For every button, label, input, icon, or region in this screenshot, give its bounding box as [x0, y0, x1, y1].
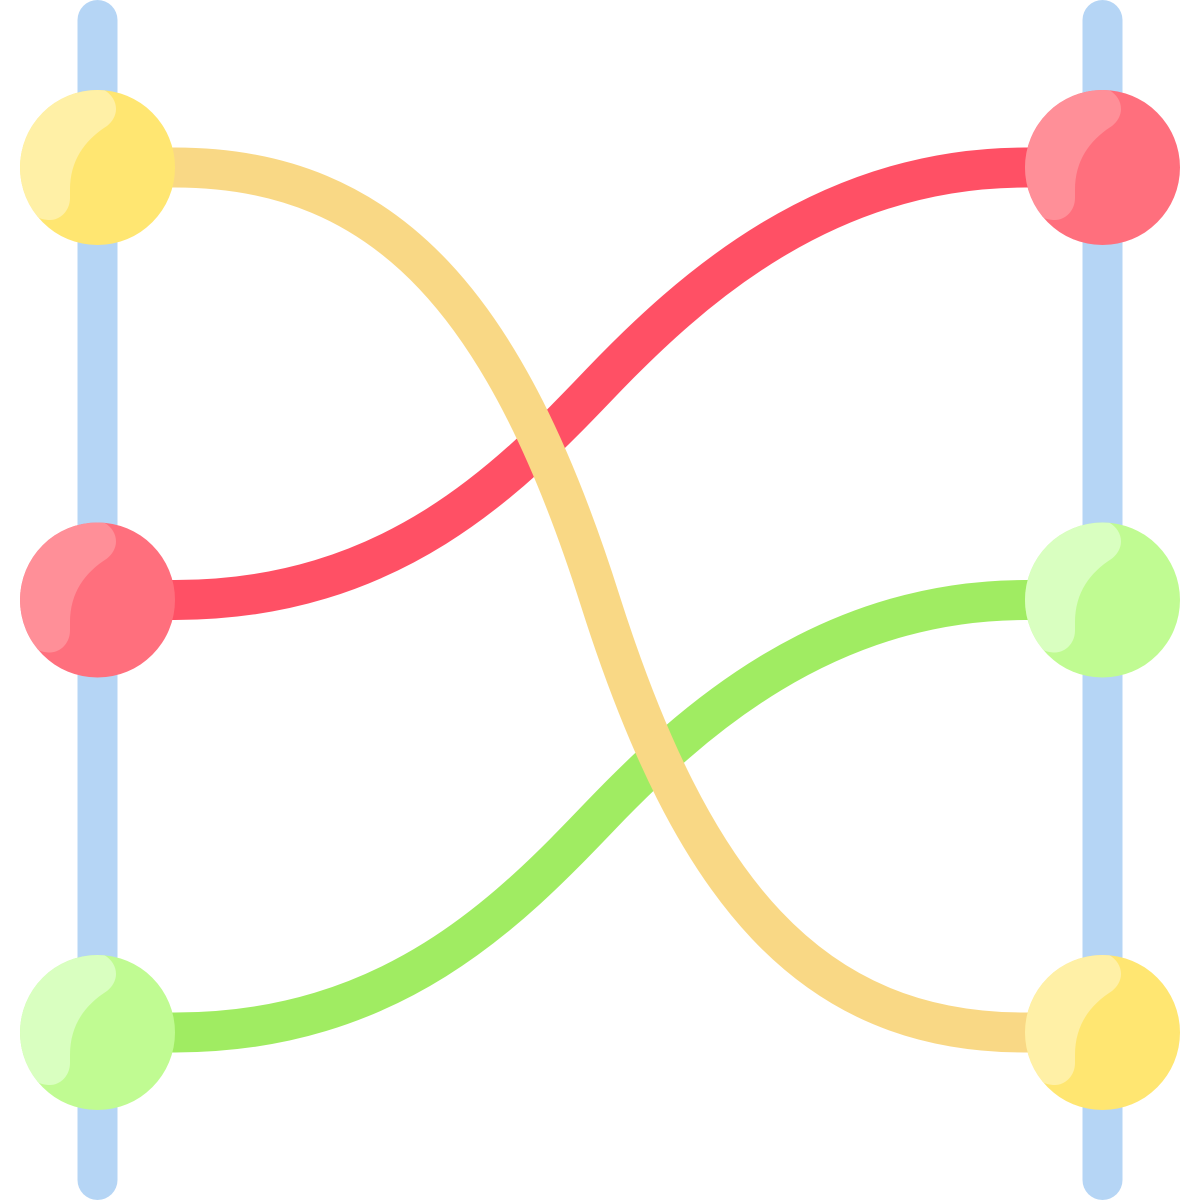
- node: red top right: [1025, 90, 1180, 245]
- yellow connection curve: [165, 168, 1035, 1032]
- green connection curve: [165, 600, 1035, 1032]
- node: green bottom left: [20, 955, 175, 1110]
- node: yellow bottom right: [1025, 955, 1180, 1110]
- node: yellow top left: [20, 90, 175, 245]
- right vertical rail: [1082, 0, 1122, 1200]
- red connection curve: [165, 168, 1035, 600]
- left vertical rail: [78, 0, 118, 1200]
- node: green middle right: [1025, 522, 1180, 678]
- node: red middle left: [20, 522, 175, 678]
